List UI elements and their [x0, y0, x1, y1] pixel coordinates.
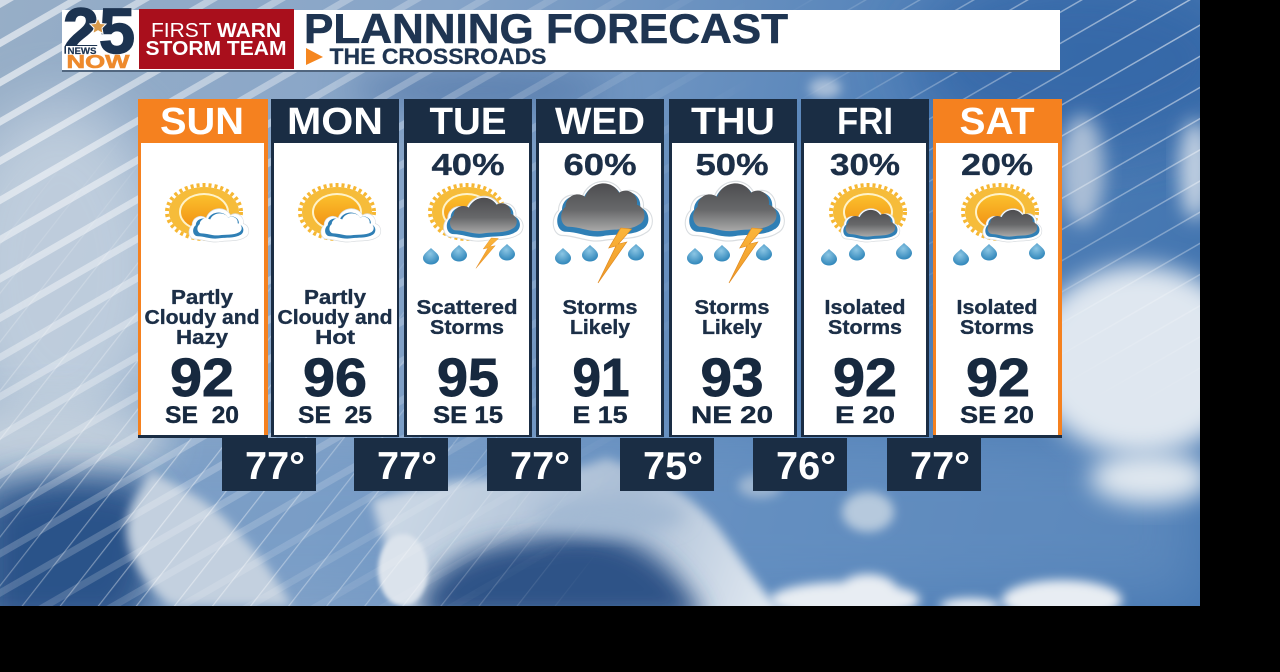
low temperature: Thu night [753, 438, 847, 491]
low temperature: Fri night: 77° [910, 445, 970, 488]
icon: sun with showers [953, 185, 1045, 266]
panel: Tuesday: 40% [432, 147, 504, 182]
subtitle: THE CROSSROADS [330, 44, 546, 69]
panel: Thursday: Storms [694, 297, 770, 319]
panel: Tuesday: 95 [437, 348, 499, 408]
panel: Thursday: NE 20 [691, 402, 773, 429]
low temperature: Thu night: 76° [776, 445, 836, 488]
panel: Thursday: 50% [696, 147, 768, 182]
icon: thunderstorm [685, 181, 784, 283]
panel: Thursday: 93 [700, 348, 764, 408]
panel: Saturday: 92 [966, 348, 1030, 408]
panel: Monday: 96 [303, 348, 367, 408]
panel: Monday: Partly [304, 287, 367, 309]
panel: Saturday: SAT [960, 101, 1034, 143]
panel: Sunday: Partly [171, 287, 234, 309]
low temperature: Mon night: 77° [377, 445, 437, 488]
panel: Tuesday: TUE [430, 101, 506, 143]
panel: Thursday: Likely [702, 317, 763, 339]
panel: Wednesday: Storms [562, 297, 638, 319]
logo: 25 News Now: NEWS [68, 46, 96, 56]
panel: Wednesday: Likely [570, 317, 631, 339]
First Warn Storm Team badge [139, 9, 294, 69]
panel: Monday: Cloudy and [278, 307, 392, 329]
low temperature: Sun night: 77° [245, 445, 305, 488]
low temperature: Tue night: 77° [510, 445, 570, 488]
First Warn Storm Team badge: FIRST WARN [151, 20, 281, 42]
low temperature: Sun night [222, 438, 316, 491]
icon: partly cloudy [300, 185, 381, 242]
panel: Tuesday: Scattered [416, 297, 518, 319]
panel: Wednesday: 60% [564, 147, 636, 182]
low temperature: Tue night [487, 438, 581, 491]
logo: 25 News Now: NOW [66, 52, 130, 72]
panel: Tuesday: SE 15 [433, 402, 503, 429]
panel: Monday: Hot [315, 327, 355, 349]
panel: Wednesday [536, 99, 664, 437]
panel: Wednesday: E 15 [572, 402, 628, 429]
panel: Friday: 30% [830, 147, 900, 182]
panel: Wednesday: WED [555, 101, 645, 143]
panel: Friday: Storms [828, 317, 902, 339]
panel: Monday: SE 25 [298, 402, 372, 429]
low temperature: Wed night: 75° [643, 445, 703, 488]
orange arrow icon [306, 48, 323, 65]
panel: Sunday: 92 [170, 348, 234, 408]
icon: sun with showers [821, 185, 912, 266]
panel: Friday: FRI [837, 101, 893, 143]
panel: Friday [801, 99, 929, 437]
First Warn Storm Team badge: STORM TEAM [146, 38, 286, 60]
title: PLANNING FORECAST [304, 5, 788, 52]
panel: Sunday: Cloudy and [144, 307, 260, 329]
panel: Tuesday: Storms [430, 317, 504, 339]
icon: thunderstorm [553, 181, 652, 283]
panel: Friday: Isolated [824, 297, 906, 319]
icon: partly cloudy [167, 185, 249, 242]
panel: Monday [271, 99, 399, 437]
panel: Thursday [669, 99, 797, 437]
panel: Saturday: 20% [961, 147, 1033, 182]
panel: Friday: E 20 [835, 402, 895, 429]
panel: Sunday: SUN [160, 101, 244, 143]
panel: Friday: 92 [833, 348, 897, 408]
header banner [62, 0, 1060, 72]
panel: Sunday [138, 99, 268, 438]
panel: Monday: MON [287, 101, 383, 143]
low temperature: Mon night [354, 438, 448, 491]
panel: Wednesday: 91 [572, 348, 630, 408]
panel: Sunday: SE 20 [165, 402, 239, 429]
panel: Saturday: Isolated [956, 297, 1038, 319]
low temperature: Wed night [620, 438, 714, 491]
panel: Saturday: SE 20 [960, 402, 1034, 429]
panel: Saturday: Storms [960, 317, 1034, 339]
panel: Saturday [933, 99, 1062, 438]
panel: Thursday: THU [691, 101, 775, 143]
low temperature: Fri night [887, 438, 981, 491]
panel: Sunday: Hazy [176, 327, 229, 349]
panel: Tuesday [404, 99, 532, 437]
icon: sun with storm [423, 185, 523, 268]
